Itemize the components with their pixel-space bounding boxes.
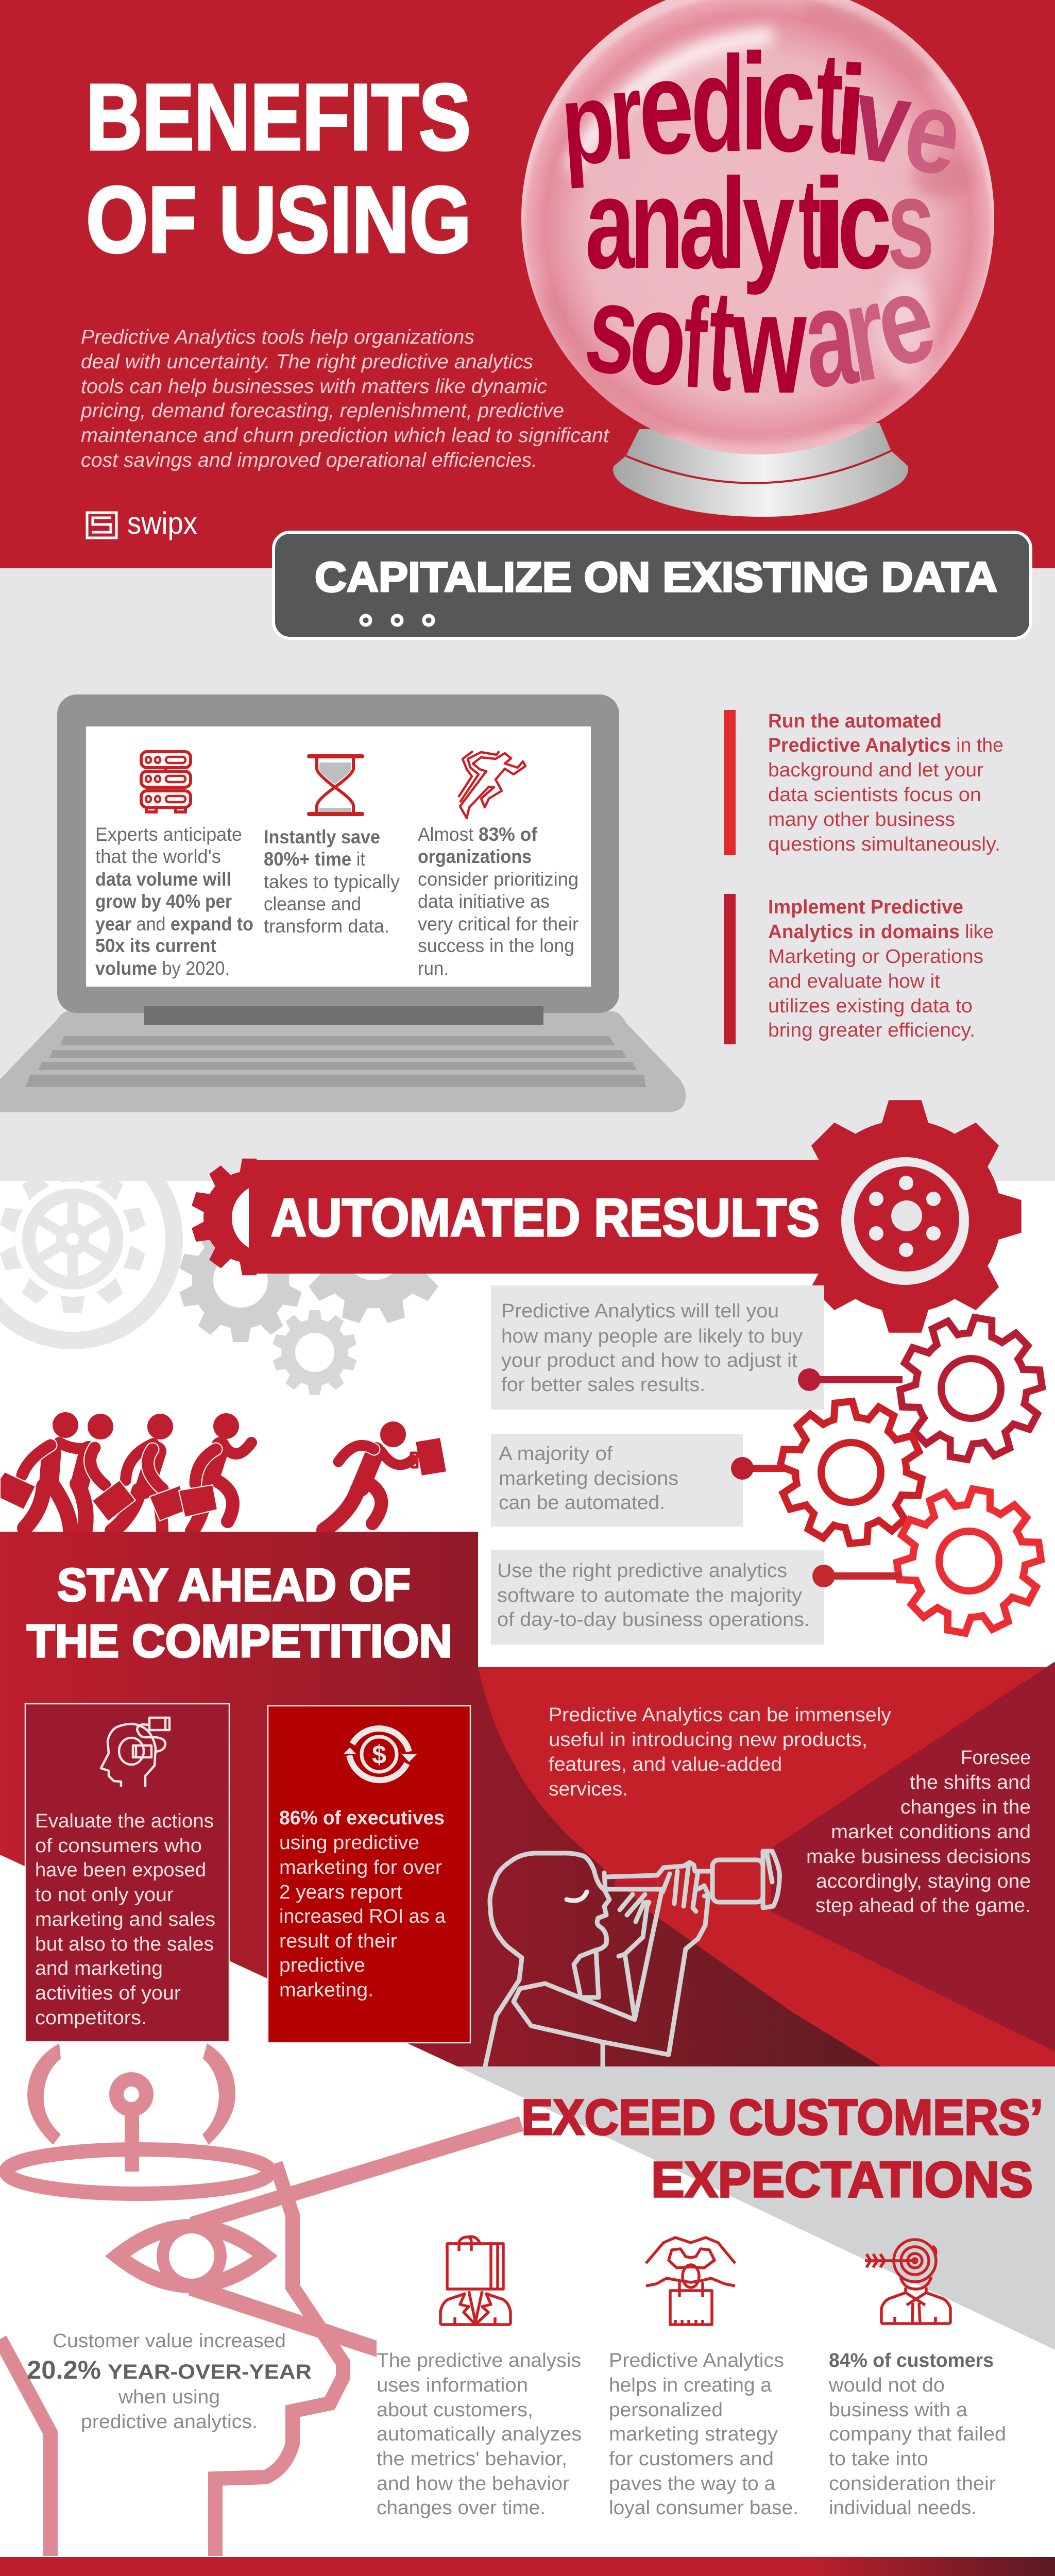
callout: implement predictive analytics: Marketing or Operations xyxy=(768,946,983,968)
ball word: software: f xyxy=(679,272,711,415)
text block: foresee the shifts: accordingly, staying one xyxy=(816,1871,1031,1892)
icon: bag-head businessman xyxy=(440,2236,511,2325)
intro paragraph: cost savings and improved operational efficiencies. xyxy=(81,449,537,471)
logo: swipx: swipx xyxy=(127,506,197,540)
stat column: organizations: data initiative as xyxy=(418,891,550,912)
pink head illustration xyxy=(0,2043,521,2556)
stat column: data volume: that the world's xyxy=(95,846,221,867)
pale decorative gears xyxy=(0,1138,466,1395)
callout: implement predictive analytics: Implement Predictive xyxy=(768,896,963,918)
ball word: software: a xyxy=(797,258,863,417)
ball word: analytics: i xyxy=(811,151,847,295)
column: 84% of customers: business with a xyxy=(829,2399,968,2421)
intro paragraph xyxy=(80,326,610,471)
crystal ball xyxy=(521,0,994,517)
text block: foresee the shifts xyxy=(806,1747,1031,1917)
ball word: software: w xyxy=(731,263,807,423)
column: personalized marketing: paves the way to a xyxy=(609,2473,776,2495)
ball word: predictive: p xyxy=(557,57,619,189)
ball word: software: o xyxy=(623,262,694,415)
stat column: data volume: data volume will xyxy=(95,869,231,890)
icon: servers xyxy=(141,752,191,812)
card: 86% of executives: 86% of executives xyxy=(279,1807,445,1829)
text block: new products xyxy=(549,1704,891,1800)
laptop illustration xyxy=(0,694,686,1112)
stat column: data volume: Experts anticipate xyxy=(95,824,242,845)
card: evaluate consumers: Evaluate the actions xyxy=(35,1810,214,1832)
left banner gear xyxy=(192,1159,307,1275)
column: personalized marketing: for customers and xyxy=(609,2448,774,2470)
card: 86% of executives xyxy=(268,1706,470,2043)
column: customer behaviour: the metrics' behavior, xyxy=(377,2448,567,2470)
text box: day-to-day operations xyxy=(491,1550,824,1645)
column: personalized marketing: Predictive Analytics xyxy=(609,2350,784,2371)
card: evaluate consumers: of consumers who xyxy=(35,1835,202,1857)
callout: run automated predictive analytics: Predictive Analytics in the xyxy=(768,735,1003,756)
card: evaluate consumers: have been exposed xyxy=(35,1859,206,1881)
ball word: software xyxy=(576,246,947,423)
ball word: analytics: n xyxy=(630,151,684,296)
column: 84% of customers xyxy=(828,2240,1006,2519)
grey corner triangle xyxy=(457,2066,1055,2350)
callout: run automated predictive analytics: questions simultaneously. xyxy=(768,834,1000,855)
stat column: organizations: organizations xyxy=(418,846,532,867)
ball word: predictive: i xyxy=(740,25,769,179)
ball word: predictive: c xyxy=(761,22,816,181)
column: customer behaviour: uses information xyxy=(377,2375,528,2396)
heading: stay ahead of the competition: STAY AHEAD OF xyxy=(57,1560,411,1611)
ball word: analytics xyxy=(585,151,934,296)
heading: stay ahead of the competition xyxy=(27,1560,452,1667)
text box: day-to-day operations: of day-to-day business operations. xyxy=(497,1609,810,1631)
stat column: data volume: volume by 2020. xyxy=(95,958,230,979)
laptop lid xyxy=(57,694,619,1013)
icon: hourglass xyxy=(307,754,364,816)
target pin xyxy=(116,2079,146,2109)
column: customer behaviour: The predictive analysis xyxy=(377,2350,581,2371)
icon: head with gears xyxy=(101,1718,169,1787)
text block: new products: services. xyxy=(549,1778,628,1800)
text block: new products: Predictive Analytics can be immensely xyxy=(549,1704,891,1726)
stat: customer value: 20.2% xyxy=(27,2355,101,2384)
laptop screen xyxy=(86,726,591,987)
text block: new products: useful in introducing new products, xyxy=(549,1729,867,1751)
text box: sales results xyxy=(491,1285,824,1410)
callout: run automated predictive analytics: background and let your xyxy=(768,759,983,781)
card: evaluate consumers xyxy=(25,1704,229,2042)
right banner gear xyxy=(789,1100,1022,1333)
icon: dollar cycle xyxy=(343,1728,417,1780)
ball word: software: s xyxy=(576,256,650,403)
stat: customer value: Customer value increased xyxy=(53,2330,286,2352)
medium grey gears xyxy=(179,1158,466,1395)
stat column: time saved: takes to typically xyxy=(264,871,400,892)
text box: sales results: how many people are likely to buy xyxy=(501,1326,803,1347)
callout: run automated predictive analytics: many other business xyxy=(768,809,955,831)
intro paragraph: Predictive Analytics tools help organizations xyxy=(81,326,474,348)
callout: implement predictive analytics: utilizes existing data to xyxy=(768,995,973,1017)
icon: target-head person xyxy=(865,2240,950,2324)
intro paragraph: pricing, demand forecasting, replenishment, predictive xyxy=(80,400,564,422)
card: 86% of executives: increased ROI as a xyxy=(279,1906,446,1927)
ball word: predictive: r xyxy=(605,44,647,187)
column: personalized marketing: marketing strategy xyxy=(609,2424,778,2445)
diagonal beams xyxy=(192,2124,521,2225)
column: personalized marketing: loyal consumer base. xyxy=(609,2497,798,2519)
banner dots xyxy=(361,616,433,625)
heads xyxy=(53,1412,406,1447)
column: 84% of customers: individual needs. xyxy=(829,2497,977,2519)
stat column: organizations: very critical for their xyxy=(418,913,578,935)
text box: marketing decisions: can be automated. xyxy=(499,1492,665,1514)
column: customer behaviour: and how the behavior xyxy=(377,2473,569,2495)
intro paragraph: maintenance and churn prediction which lead to significant xyxy=(81,425,610,447)
ball word: software: t xyxy=(705,259,738,421)
stat column: time saved: Instantly save xyxy=(264,826,380,848)
column: customer behaviour: automatically analyzes xyxy=(377,2424,582,2445)
text box: marketing decisions xyxy=(491,1434,743,1527)
sources heading xyxy=(801,2557,1055,2576)
ball word: predictive xyxy=(557,21,973,202)
text block: foresee the shifts: make business decisions xyxy=(806,1846,1031,1868)
icon: dollar cycle: $ xyxy=(372,1740,386,1769)
ball word: predictive: i xyxy=(831,39,871,182)
stat column: time saved: transform data. xyxy=(264,916,389,937)
ball word: predictive: t xyxy=(813,21,845,182)
section banner: automated results xyxy=(192,1100,1022,1333)
stat: customer value: YEAR-OVER-YEAR xyxy=(108,2361,312,2383)
text block: foresee the shifts: Foresee xyxy=(961,1747,1031,1769)
card: 86% of executives: 2 years report xyxy=(279,1882,402,1903)
text box: marketing decisions: A majority of xyxy=(499,1443,612,1465)
stat column: organizations xyxy=(418,751,578,979)
callout: implement predictive analytics: and evaluate how it xyxy=(768,971,940,992)
callout: implement predictive analytics: bring greater efficiency. xyxy=(768,1020,975,1041)
text block: new products: features, and value-added xyxy=(549,1754,782,1775)
title: BENEFITS xyxy=(86,64,471,170)
callout: run automated predictive analytics: Run the automated xyxy=(768,710,942,732)
footer panel xyxy=(0,2557,1055,2576)
card: evaluate consumers: but also to the sales xyxy=(35,1934,214,1955)
ball word: software: r xyxy=(833,253,897,411)
ball word: predictive: v xyxy=(846,50,918,190)
figure bodies xyxy=(25,1443,413,1531)
callout: run automated predictive analytics xyxy=(724,710,1003,855)
ball word: predictive: e xyxy=(894,63,973,202)
laptop keyboard rows xyxy=(26,1036,646,1087)
eye xyxy=(117,2227,265,2285)
ball word: software: e xyxy=(861,246,947,394)
text block: foresee the shifts: changes in the xyxy=(900,1797,1031,1818)
stat column: organizations: Almost 83% of xyxy=(418,824,538,845)
column: 84% of customers: 84% of customers xyxy=(829,2350,994,2371)
ball word: analytics: a xyxy=(585,151,635,295)
card: evaluate consumers: to not only your xyxy=(35,1884,174,1906)
stat: customer value xyxy=(27,2330,312,2433)
stat: customer value: when using xyxy=(118,2386,220,2408)
callout: implement predictive analytics xyxy=(724,894,994,1044)
text block: foresee the shifts: market conditions and xyxy=(831,1821,1031,1843)
text box: day-to-day operations: software to automate the majority xyxy=(497,1585,802,1606)
card: 86% of executives: marketing for over xyxy=(279,1857,442,1878)
large pale gear xyxy=(0,1181,183,1349)
stat column: data volume: grow by 40% per xyxy=(95,891,232,912)
icon: runner xyxy=(458,751,525,818)
section banner: automated results: AUTOMATED RESULTS xyxy=(271,1188,820,1248)
card: evaluate consumers: and marketing xyxy=(35,1958,163,1979)
ball word: predictive: d xyxy=(691,29,745,180)
stat column: data volume: 50x its current xyxy=(95,935,216,956)
head contour xyxy=(215,2163,343,2556)
text block: foresee the shifts: the shifts and xyxy=(910,1772,1031,1793)
briefcases xyxy=(0,1437,447,1521)
section banner: capitalize on existing data: CAPITALIZE ON EXISTING DATA xyxy=(315,554,997,601)
column: personalized marketing: helps in creating a xyxy=(609,2375,772,2396)
column: customer behaviour: changes over time. xyxy=(377,2497,546,2519)
ball word: analytics: y xyxy=(742,152,795,296)
ball word: analytics: l xyxy=(720,151,747,295)
person with telescope xyxy=(485,1851,779,2066)
column: personalized marketing: personalized xyxy=(609,2399,723,2421)
gear connector 3 xyxy=(812,1478,1051,1644)
intro paragraph: deal with uncertainty. The right predictive analytics xyxy=(81,351,533,373)
ball word: predictive: e xyxy=(635,31,697,183)
card: evaluate consumers: activities of your xyxy=(35,1982,181,2004)
head ring xyxy=(6,2149,270,2194)
radar arcs xyxy=(27,2043,235,2145)
column: 84% of customers: consideration their xyxy=(829,2473,996,2495)
icon: hands with bag xyxy=(646,2238,735,2325)
text block: foresee the shifts: step ahead of the game. xyxy=(815,1895,1031,1917)
glass sphere xyxy=(521,0,994,454)
column: personalized marketing xyxy=(609,2238,798,2519)
card: evaluate consumers: marketing and sales xyxy=(35,1909,215,1930)
title xyxy=(86,64,471,272)
laptop base xyxy=(0,1011,686,1112)
text box: marketing decisions: marketing decisions xyxy=(499,1468,678,1489)
card: 86% of executives: result of their xyxy=(279,1930,397,1952)
heading: exceed customers' expectations xyxy=(521,2089,1043,2208)
stat column: time saved xyxy=(264,754,400,937)
section banner: capitalize on existing data xyxy=(274,532,1031,638)
text box: sales results: your product and how to adjust it xyxy=(501,1350,797,1371)
laptop hinge xyxy=(144,1006,543,1025)
card: evaluate consumers: competitors. xyxy=(35,2007,147,2029)
ball word: analytics: s xyxy=(887,151,934,295)
column: 84% of customers: would not do xyxy=(828,2375,945,2396)
callout: implement predictive analytics: Analytics in domains like xyxy=(768,921,994,943)
text box: day-to-day operations: Use the right predictive analytics xyxy=(497,1560,787,1582)
text box: sales results: Predictive Analytics will tell you xyxy=(501,1300,779,1322)
competition background shapes xyxy=(0,1532,1055,2066)
intro paragraph: tools can help businesses with matters like dynamic xyxy=(81,376,548,398)
ball stand xyxy=(613,423,908,517)
gear connector 2 xyxy=(731,1395,928,1550)
column: customer behaviour xyxy=(377,2236,582,2519)
callout: run automated predictive analytics: data scientists focus on xyxy=(768,784,981,806)
title: OF USING xyxy=(86,167,471,272)
stat column: organizations: run. xyxy=(418,958,449,979)
heading: stay ahead of the competition: THE COMPETITION xyxy=(27,1616,452,1667)
stat: customer value: predictive analytics. xyxy=(81,2411,258,2433)
stat column: data volume: year and expand to xyxy=(95,913,253,935)
column: 84% of customers: to take into xyxy=(829,2448,928,2470)
logo: swipx xyxy=(87,506,197,540)
stat column: organizations: consider prioritizing xyxy=(418,869,578,890)
ball word: analytics: a xyxy=(679,151,729,295)
walking business people xyxy=(0,1412,447,1531)
heading: exceed customers' expectations: EXPECTATIONS xyxy=(651,2151,1033,2208)
card: 86% of executives: marketing. xyxy=(279,1979,373,2001)
connector gears xyxy=(731,1307,1052,1644)
stat column: data volume xyxy=(95,752,253,979)
stat column: time saved: cleanse and xyxy=(264,893,361,914)
text box: sales results: for better sales results. xyxy=(501,1374,705,1396)
stat column: organizations: success in the long xyxy=(418,935,574,956)
arms with outline xyxy=(22,1444,374,1489)
column: 84% of customers: company that failed xyxy=(829,2424,1006,2445)
stat column: time saved: 80%+ time it xyxy=(264,849,366,870)
ball word: analytics: t xyxy=(798,152,821,296)
ball word: analytics: c xyxy=(837,152,892,296)
card: 86% of executives: predictive xyxy=(279,1955,365,1976)
gear connector 1 xyxy=(798,1307,1052,1470)
card: 86% of executives: using predictive xyxy=(279,1832,419,1854)
column: customer behaviour: about customers, xyxy=(377,2399,533,2421)
